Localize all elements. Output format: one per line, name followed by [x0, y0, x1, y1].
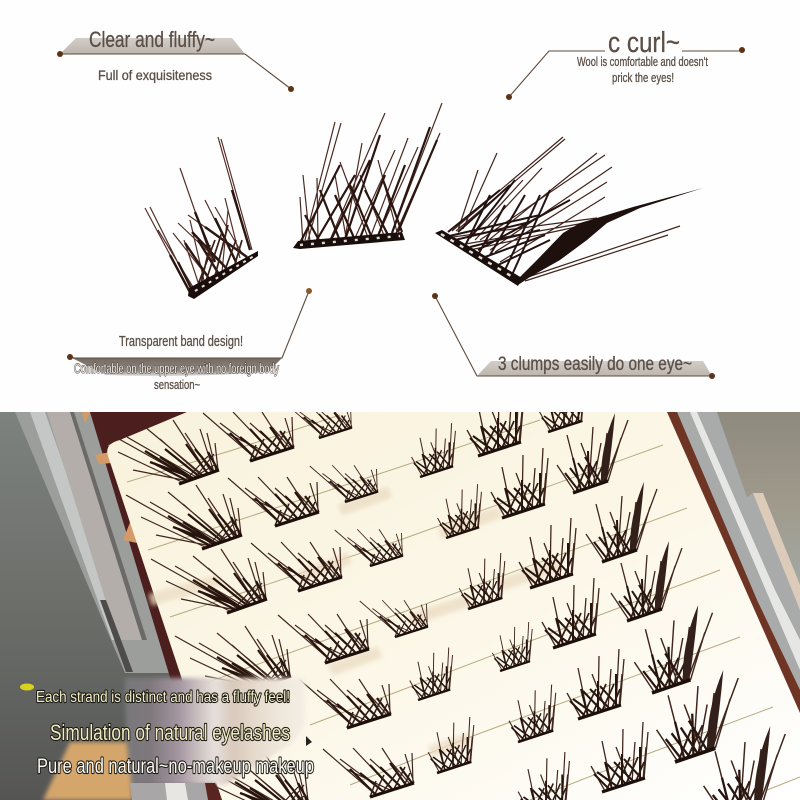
left silver frame: [15, 412, 170, 673]
right maroon band: [667, 412, 800, 715]
callout: 3 clumps: [432, 293, 715, 379]
right background: [717, 412, 800, 600]
cream card: [107, 412, 800, 800]
lash cluster: left: [145, 137, 258, 299]
maroon tray band: [90, 412, 230, 800]
copper patches: [82, 412, 137, 543]
heading: transparent band design: Transparent band design!: [119, 333, 243, 350]
text: sensation: sensation~: [154, 377, 200, 392]
lash clusters column 3: [284, 401, 474, 773]
guide lines: [127, 415, 800, 800]
text: prick the eyes: prick the eyes!: [612, 70, 674, 85]
background: [0, 0, 800, 412]
photo: lash tray: [0, 376, 800, 800]
right silver frame: [677, 412, 800, 715]
text: pure and natural: Pure and natural~no-makeup makeup: [37, 755, 314, 778]
text: comfortable on the upper eye: Comfortable on the upper eye with no foreign body: [74, 361, 279, 376]
smeared lower-left area: [43, 678, 312, 800]
callout: c curl: [506, 27, 745, 100]
lash cluster: right: [435, 137, 703, 286]
heading: c curl: c curl~: [608, 27, 680, 59]
callout: clear and fluffy: [57, 27, 294, 92]
lash clusters column 6: [539, 376, 785, 800]
text: simulation: Simulation of natural eyelashes: [50, 720, 290, 745]
lash clusters column 2: [203, 412, 414, 797]
lash clusters column 5: [467, 386, 648, 792]
text: each strand: Each strand is distinct and has a fluffy feel!: [36, 689, 290, 706]
text: full of exquisiteness: Full of exquisiteness: [98, 67, 212, 83]
yellow glint: [20, 684, 34, 690]
tape strips: [150, 492, 560, 752]
heading: clear and fluffy: Clear and fluffy~: [89, 27, 215, 52]
text: wool is comfortable: Wool is comfortable and doesn't: [577, 54, 708, 69]
heading: 3 clumps easily do one eye: 3 clumps easily do one eye~: [498, 354, 692, 375]
callout: transparent band: [67, 288, 312, 392]
lash cluster: middle: [293, 103, 442, 249]
lash clusters column 1: [103, 420, 309, 800]
lash clusters column 4: [412, 423, 569, 800]
